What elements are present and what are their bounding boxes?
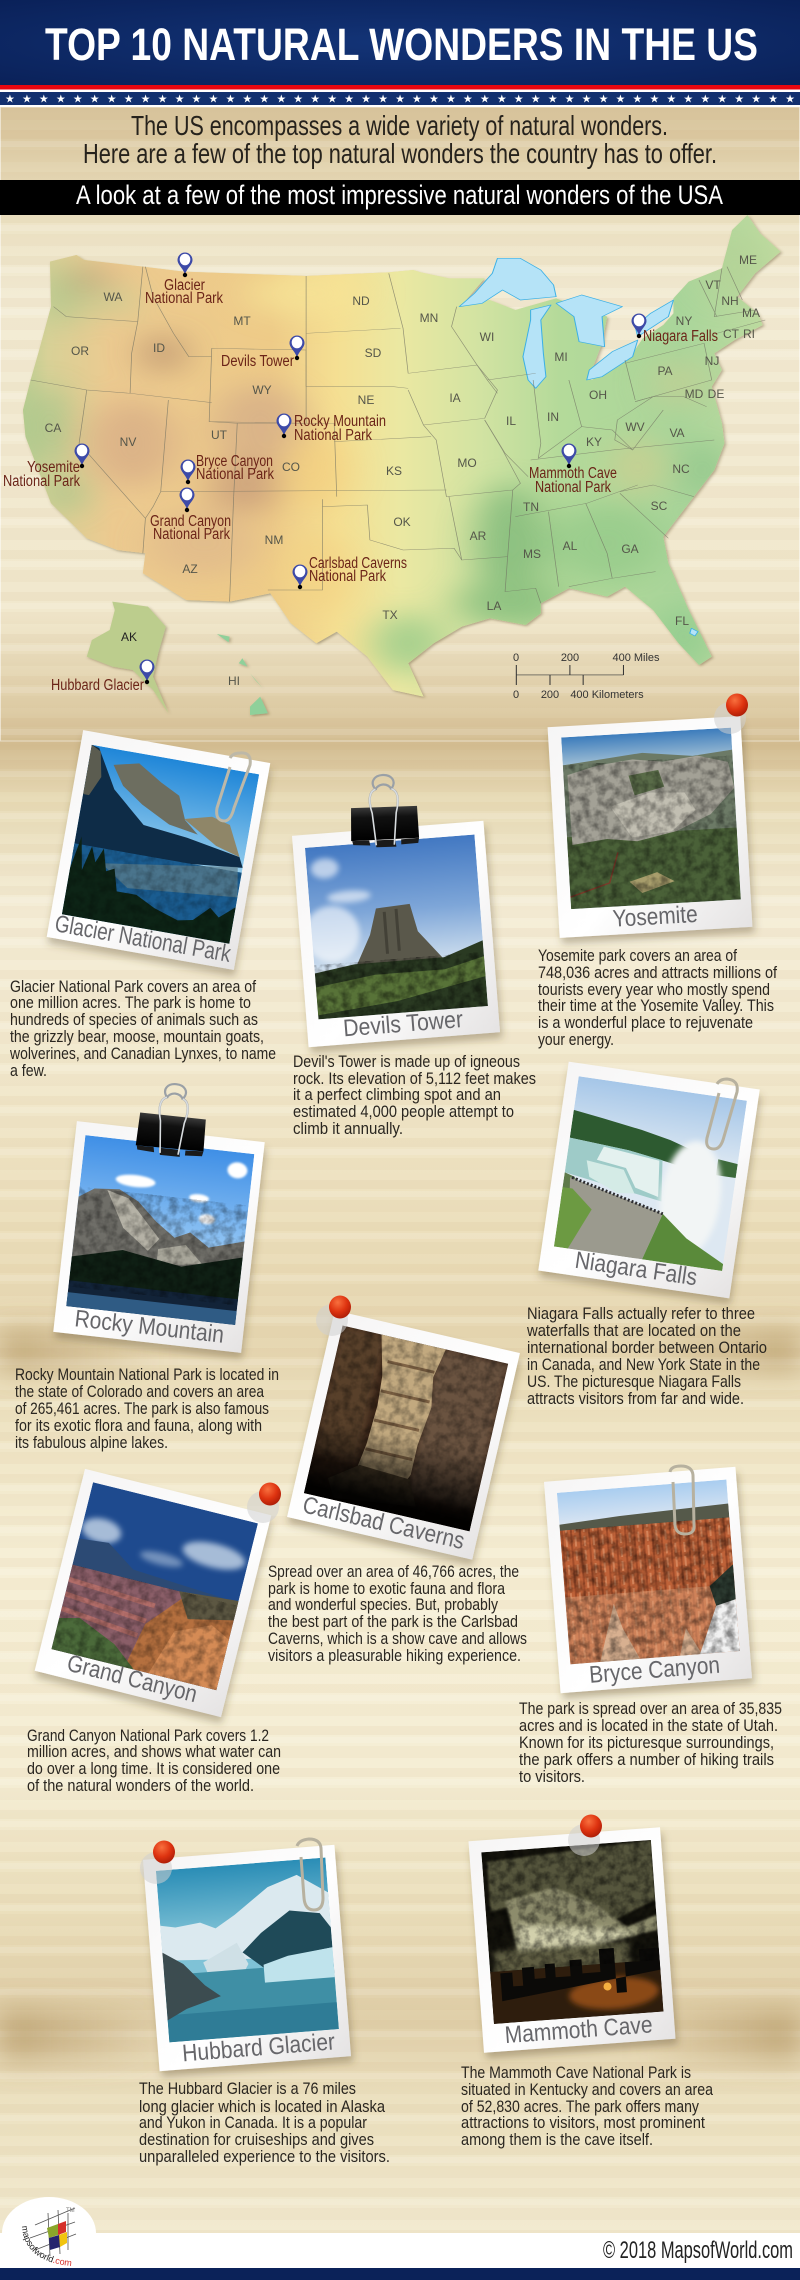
caption: Mammoth Cave [504,2011,653,2049]
map place labels: Grand Canyon [150,513,231,530]
header banner [0,0,800,85]
text: Glacier: hundreds of species of animals such as [10,1010,258,1029]
Great Lakes [459,258,698,636]
state abbreviations: AK [121,630,137,644]
text: Glacier [9,977,276,1080]
state abbreviations: WA [104,290,122,304]
state abbreviations: NY [676,314,692,328]
photo card: Rocky Mountain [53,1121,265,1353]
scale bar [516,665,623,685]
text: Glacier: the grizzly bear, moose, mountain goats, [10,1027,264,1046]
map place labels: Devils Tower [221,353,294,370]
text: Mammoth Cave: The Mammoth Cave National Park is [461,2063,691,2082]
state abbreviations: MD [685,387,704,401]
text: Niagara Falls [526,1304,767,1408]
state abbreviations: IN [547,410,559,424]
state abbreviations: MT [233,314,251,328]
text: Mammoth Cave [461,2063,713,2149]
state abbreviations: TX [382,608,398,622]
state abbreviations: AR [470,529,487,543]
caption: Carlsbad Caverns [300,1492,467,1555]
state abbreviations: DE [708,387,724,401]
text: Mammoth Cave: of 52,830 acres. The park offers many [461,2097,699,2116]
text: Hubbard Glacier: destination for cruiseships and gives [139,2130,374,2149]
state abbreviations: NH [721,294,739,308]
text: Carlsbad Caverns: visitors a pleasurable hiking experience. [268,1646,521,1665]
text: Mammoth Cave: attractions to visitors, most prominent [461,2113,705,2132]
photo card: Devils Tower [292,821,500,1047]
text: Niagara Falls: US. The picturesque Niagara Falls [527,1372,741,1391]
state abbreviations: MI [554,350,568,364]
text: Devils Tower [293,1052,536,1138]
text: Mammoth Cave: among them is the cave itself. [461,2130,653,2149]
state abbreviations: CT [723,327,740,341]
state abbreviations: OK [393,515,411,529]
state abbreviations: UT [211,428,228,442]
text: Niagara Falls: Niagara Falls actually refer to three [527,1304,755,1323]
state abbreviations: WY [252,383,272,397]
icon: paper clip [670,1466,694,1534]
state abbreviations: LA [487,599,501,613]
text: Hubbard Glacier [139,2079,390,2166]
text: Grand Canyon: of the natural wonders of the world. [27,1776,254,1795]
state abbreviations: KY [586,435,602,449]
scale labels: 200 [561,652,579,664]
state abbreviations: SC [651,499,668,513]
photo card: Hubbard Glacier [143,1845,351,2071]
text: Glacier: Glacier National Park covers an area of [10,977,256,996]
state abbreviations: NJ [705,354,719,368]
state abbreviations: PA [657,364,673,378]
state abbreviations: WI [480,330,494,344]
photo card: Mammoth Cave [468,1827,676,2053]
logo: TM [66,2208,75,2214]
state abbreviations: OH [589,388,607,402]
state abbreviations: AZ [182,562,198,576]
state abbreviations: ND [352,294,370,308]
text: Carlsbad Caverns: Caverns, which is a show cave and allows [268,1629,527,1648]
text: Grand Canyon: million acres, and shows what water can [27,1742,281,1761]
map place labels: Mammoth Cave [529,465,617,482]
state abbreviations: CA [45,421,61,435]
state abbreviations: MS [523,547,541,561]
text: Rocky Mountain: Rocky Mountain National Park is located in [15,1365,279,1384]
state abbreviations: MO [457,456,477,470]
text: Bryce Canyon: to visitors. [519,1767,585,1786]
state abbreviations: AL [563,539,578,553]
intro text [83,110,717,169]
state abbreviations: KS [386,464,402,478]
state abbreviations: HI [228,674,240,688]
text: Hubbard Glacier: The Hubbard Glacier is a 76 miles [139,2079,356,2098]
logo [2,2197,96,2266]
state abbreviations: NC [672,462,690,476]
text: Glacier: wolverines, and Canadian Lynxes, to name [9,1044,276,1063]
text: Carlsbad Caverns: park is home to exotic fauna and flora [268,1579,505,1598]
state abbreviations: VT [705,278,721,292]
map place labels: National Park [294,427,372,444]
icon: red push pin [316,1296,351,1336]
map place labels: National Park [309,568,386,585]
text: Bryce Canyon [519,1699,782,1786]
state abbreviations: WV [625,420,645,434]
text: Hubbard Glacier: and Yukon in Canada. It is a popular [139,2113,367,2132]
text: Yosemite [538,946,777,1049]
text: Niagara Falls: waterfalls that are located on the [526,1321,741,1340]
map place labels: Hubbard Glacier [51,677,144,694]
scale labels: 0 [513,689,519,701]
caption: Glacier National Park [53,910,234,968]
text: Grand Canyon: Grand Canyon National Park covers 1.2 [27,1726,269,1745]
Alaska and Hawaii [87,602,268,715]
map place labels: Glacier [164,277,205,294]
state abbreviations: VA [669,426,685,440]
map of the USA [0,210,800,730]
caption: Devils Tower [342,1006,464,1042]
text: Hubbard Glacier: unparalleled experience to the visitors. [139,2147,390,2166]
map place labels: Niagara Falls [643,328,718,345]
state abbreviations: MN [420,311,438,325]
text: Glacier: a few. [10,1061,47,1080]
photo card: Glacier National Park [47,730,270,970]
map place labels: National Park [3,473,80,490]
caption: Grand Canyon [64,1650,200,1708]
state borders [31,267,765,603]
text: Niagara Falls: attracts visitors from far and wide. [527,1389,744,1408]
text: Mammoth Cave: situated in Kentucky and covers an area [461,2080,713,2099]
text: Carlsbad Caverns: the best part of the park is the Carlsbad [268,1612,518,1631]
text: Carlsbad Caverns: and wonderful species. But, probably [268,1595,498,1614]
icon: red push pin [247,1482,281,1523]
text: Grand Canyon: do over a long time. It is considered one [27,1759,280,1778]
icon: paper clip [707,1079,737,1149]
map markers [74,252,646,684]
state abbreviations: GA [621,542,639,556]
text: Yosemite: Yosemite park covers an area of [538,946,737,965]
icon: binder clip [135,1081,210,1159]
scale labels: 200 [541,689,559,701]
scale labels: 0 [513,652,519,664]
state abbreviations: OR [71,344,89,358]
text: Devils Tower: estimated 4,000 people attempt to [293,1102,514,1121]
icon: binder clip [349,774,419,848]
text: Carlsbad Caverns [268,1562,527,1665]
photo card: Bryce Canyon [544,1467,752,1693]
text: Rocky Mountain [15,1365,279,1452]
text: Devils Tower: climb it annually. [293,1119,403,1138]
map place labels: National Park [145,290,223,307]
flag stripe with stars: ★★★★★★★★★★★★★★★★★★★★★★★★★★★★★★★★★★★★★★★★★★★★★★★ [5,92,795,105]
text: Devils Tower: Devil's Tower is made up of igneous [293,1052,520,1071]
text: Rocky Mountain: its fabulous alpine lakes. [15,1433,168,1452]
text: Yosemite: is a wonderful place to rejuvenate [538,1013,753,1032]
text: Carlsbad Caverns: Spread over an area of 46,766 acres, the [268,1562,519,1581]
photo card: Yosemite [548,716,752,938]
caption: Bryce Canyon [588,1652,721,1689]
text: Grand Canyon [27,1726,281,1795]
map place labels: Rocky Mountain [294,413,386,430]
scale labels: 400 Kilometers [570,689,644,701]
footer [0,2233,800,2280]
caption: Yosemite [612,901,698,933]
logo: mapsofworld.com [22,2226,72,2266]
state abbreviations: TN [523,500,539,514]
map place labels: National Park [535,479,611,496]
photo card: Grand Canyon [35,1469,271,1717]
photo card: Niagara Falls [538,1062,760,1298]
state abbreviations: IA [449,391,461,405]
state abbreviations: ME [739,253,757,267]
map place labels: National Park [196,466,274,483]
flag stripe with stars [0,85,800,107]
text: Devils Tower: rock. Its elevation of 5,112 feet makes [293,1069,536,1088]
state abbreviations: FL [675,614,689,628]
map place labels: National Park [153,526,230,543]
scale labels [513,652,660,701]
text: Rocky Mountain: for its exotic flora and fauna, along with [15,1416,262,1435]
text: Niagara Falls: international border between Ontario [527,1338,767,1357]
icon: paper clip [297,1839,323,1910]
text: Glacier: one million acres. The park is home to [10,993,251,1012]
map place labels: Carlsbad Caverns [309,555,407,572]
photo card: Carlsbad Caverns [287,1310,520,1560]
icon: red push pin [568,1814,602,1856]
state abbreviations: RI [743,327,755,341]
state abbreviations: NM [265,533,283,547]
state abbreviations: SD [365,346,382,360]
state abbreviations: NV [120,435,136,449]
state abbreviations: CO [282,460,300,474]
icon: paper clip [217,753,250,821]
scale labels: 400 Miles [612,652,660,664]
icon: red push pin [714,694,748,734]
caption: Hubbard Glacier [181,2028,336,2067]
text: Rocky Mountain: of 265,461 acres. The park is also famous [15,1399,269,1418]
state abbreviations: ID [153,341,165,355]
text: Rocky Mountain: the state of Colorado and covers an area [15,1382,264,1401]
caption: Niagara Falls [573,1247,699,1291]
state abbreviations [45,253,760,688]
icon: red push pin [140,1840,175,1884]
map place labels: Yosemite [27,459,80,476]
map place labels: Bryce Canyon [196,453,273,470]
text: Hubbard Glacier: long glacier which is located in Alaska [139,2097,385,2116]
caption: Rocky Mountain [73,1305,225,1349]
text: Devils Tower: it a perfect climbing spot and an [293,1085,501,1104]
state abbreviations: IL [506,414,516,428]
state abbreviations: NE [358,393,374,407]
text: Yosemite: your energy. [538,1030,614,1049]
state abbreviations: MA [742,306,760,320]
map place labels [3,277,718,694]
